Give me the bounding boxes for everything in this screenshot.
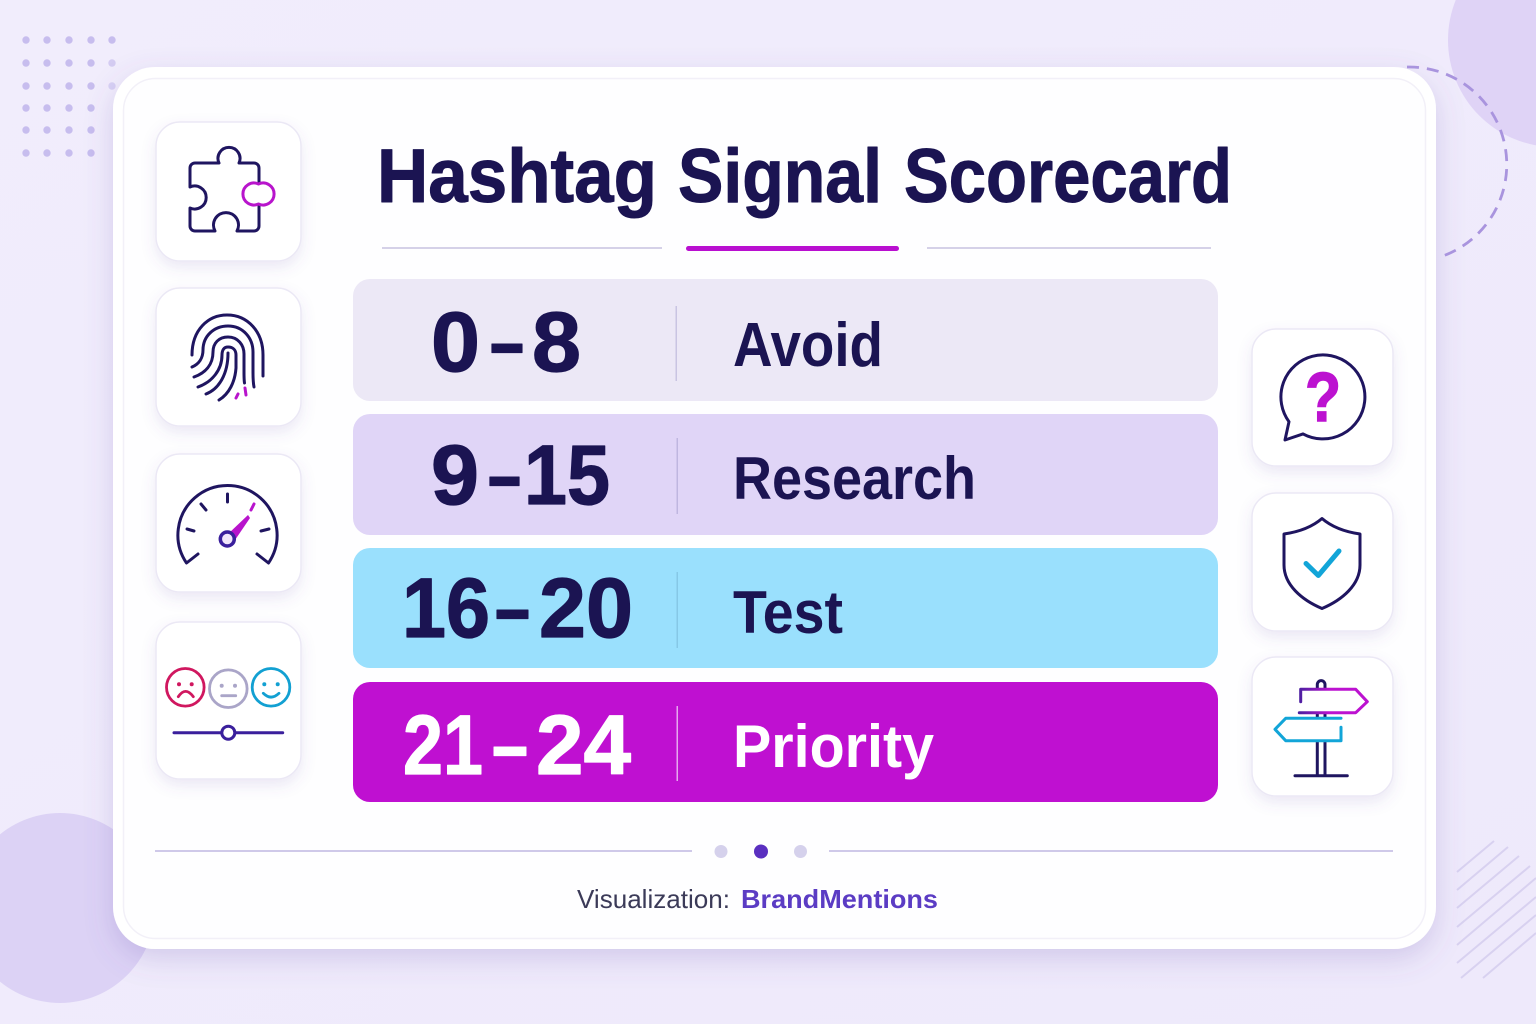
row: 16-20 Test — [353, 548, 1218, 668]
row: 9-15 Research: – — [488, 428, 521, 522]
footer divider with pager dots — [155, 844, 1393, 858]
footer credit: BrandMentions — [741, 884, 938, 914]
row: 0-8 Avoid: – — [490, 295, 524, 389]
icon tile: fingerprint — [156, 288, 301, 426]
main card — [113, 67, 1436, 949]
decorative circle top right — [1448, 0, 1536, 147]
title: Signal — [678, 134, 882, 219]
decorative dashed arc — [1407, 67, 1507, 257]
row: 21-24 Priority: 24 — [536, 698, 631, 792]
icon tile: question speech bubble — [1252, 329, 1393, 466]
row: 9-15 Research: Research — [733, 445, 976, 512]
sad face — [166, 668, 204, 706]
icon tile: question speech bubble: ? — [1305, 358, 1341, 436]
row: 16-20 Test: 20 — [539, 561, 633, 655]
title: Hashtag — [377, 134, 657, 219]
row: 9-15 Research: 9 — [431, 428, 479, 522]
row: 16-20 Test: – — [495, 561, 530, 655]
decorative dot grid — [22, 36, 116, 157]
footer credit: Visualization: — [577, 884, 730, 914]
row: 9-15 Research — [353, 414, 1218, 535]
row: 9-15 Research: 15 — [524, 428, 610, 522]
icon tile: speed gauge — [156, 454, 301, 592]
title divider — [382, 246, 1211, 251]
row: 0-8 Avoid: Avoid — [733, 311, 883, 380]
row: 0-8 Avoid: 0 — [431, 295, 480, 389]
icon tile: shield with check — [1252, 493, 1393, 631]
slider — [174, 726, 283, 739]
title: Scorecard — [904, 134, 1232, 219]
icon tile: sentiment faces and slider — [156, 622, 301, 779]
icon tile: signpost — [1252, 657, 1393, 796]
row: 16-20 Test: 16 — [402, 561, 490, 655]
row: 21-24 Priority — [353, 682, 1218, 802]
happy face — [252, 668, 290, 706]
icon tile: puzzle piece — [156, 122, 301, 261]
decorative hatch lines — [1457, 841, 1536, 978]
neutral face — [210, 670, 247, 708]
decorative circle bottom left — [0, 813, 155, 1003]
row: 21-24 Priority: – — [492, 698, 528, 792]
row: 21-24 Priority: 21 — [403, 698, 483, 792]
row: 0-8 Avoid: 8 — [532, 295, 581, 389]
row: 0-8 Avoid — [353, 279, 1218, 401]
row: 16-20 Test: Test — [733, 579, 843, 646]
row: 21-24 Priority: Priority — [733, 713, 935, 780]
